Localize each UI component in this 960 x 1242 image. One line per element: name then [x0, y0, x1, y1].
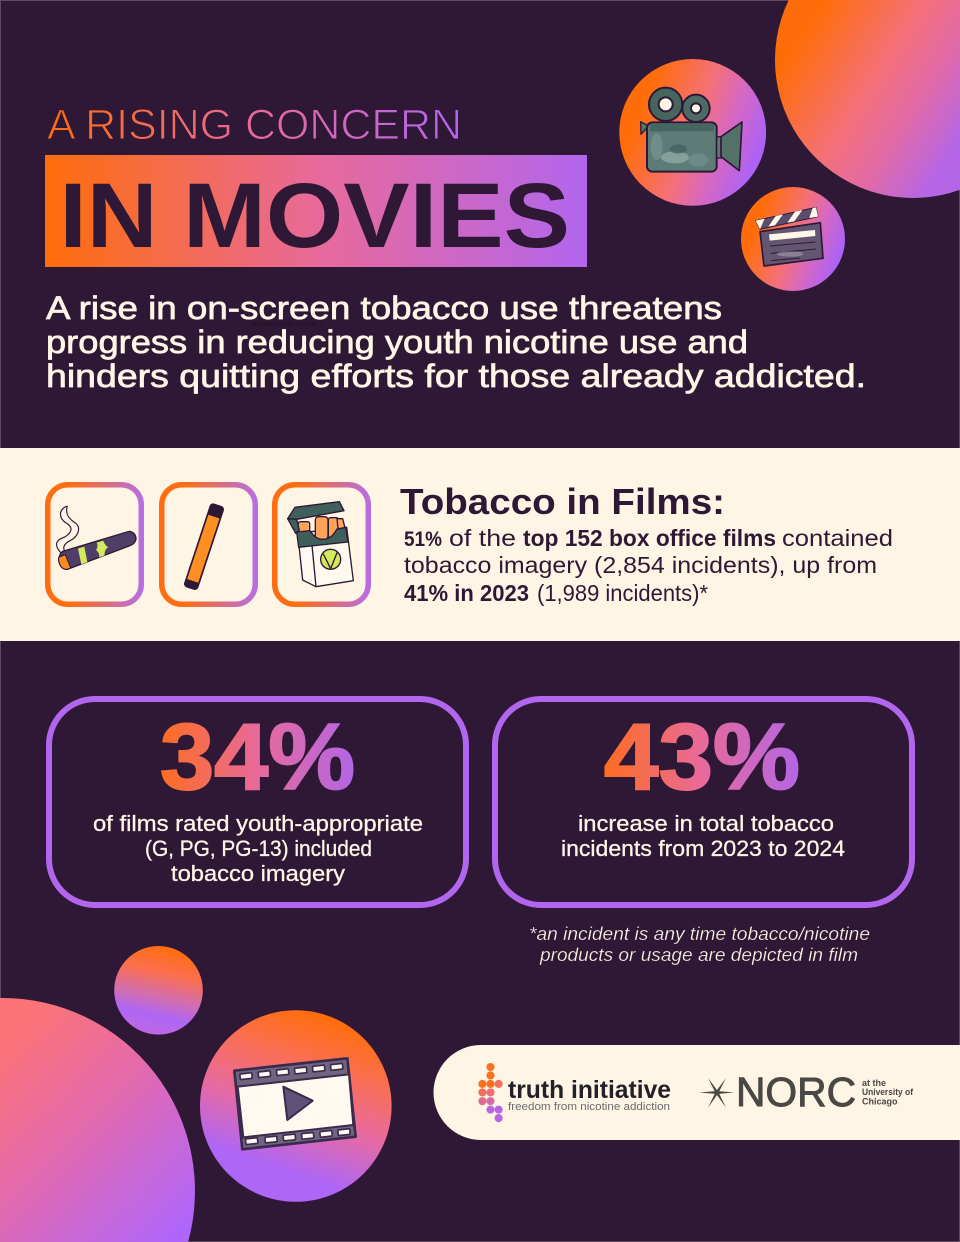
- icon: film strip: [200, 1010, 392, 1202]
- decorative circle: lower left small: [114, 946, 203, 1035]
- panel: tobacco in films: [0, 448, 960, 641]
- panel: logos: [434, 1045, 960, 1140]
- logo: truth initiative: freedom from nicotine addiction: [508, 1101, 670, 1113]
- stray label: Movies-info-social-1: [252, 319, 324, 328]
- title: kicker: A RISING CONCERN: [47, 101, 462, 149]
- logo: NORC: NORC: [736, 1069, 856, 1115]
- text block: tobacco stats: 41% in 2023: [404, 580, 529, 606]
- text block: tobacco stats: [404, 525, 893, 606]
- stat card: 43%: 43%: [604, 704, 800, 809]
- logo: NORC: [699, 1069, 914, 1115]
- text block: tobacco stats: of the: [449, 525, 516, 551]
- icon: vape: [162, 485, 255, 604]
- stat card: 34%: [49, 699, 466, 905]
- footnote: products or usage are depicted in film: [539, 945, 858, 965]
- subtitle text block: hinders quitting efforts for those already addicted.: [46, 358, 866, 394]
- subtitle text block: progress in reducing youth nicotine use and: [46, 324, 748, 360]
- text block: tobacco stats: (1,989 incidents)*: [537, 580, 708, 606]
- decorative circle: lower left large: [0, 998, 195, 1242]
- footnote: [529, 924, 870, 965]
- subtitle text block: A rise in on-screen tobacco use threatens: [46, 290, 722, 326]
- stat card: 34%: (G, PG, PG-13) included: [145, 836, 372, 861]
- logo: truth initiative: truth initiative: [508, 1076, 671, 1104]
- stat card: 43%: [495, 699, 912, 905]
- decorative circle: top right: [775, 0, 960, 198]
- icon: cigar: [48, 485, 141, 604]
- text block: tobacco stats: top 152 box office films: [523, 525, 776, 551]
- title: in movies band: IN: [60, 165, 158, 267]
- title: in movies band: MOVIES: [183, 165, 570, 267]
- icon: movie camera: [619, 59, 766, 206]
- stat card: 34%: 34%: [160, 704, 355, 809]
- logo: NORC: Chicago: [862, 1096, 898, 1106]
- heading: tobacco in films: Tobacco in Films:: [400, 481, 725, 522]
- footnote: *an incident is any time tobacco/nicotine: [529, 924, 870, 944]
- stat card: 34%: of films rated youth-appropriate: [93, 811, 423, 836]
- title: in movies band: [45, 155, 587, 267]
- text block: tobacco stats: 51%: [404, 528, 442, 551]
- logo: NORC: at the: [862, 1078, 886, 1088]
- text block: tobacco stats: contained: [782, 525, 893, 551]
- subtitle text block: [46, 290, 866, 394]
- stat card: 34%: tobacco imagery: [171, 861, 345, 886]
- stat card: 43%: incidents from 2023 to 2024: [561, 836, 845, 861]
- logo: NORC: University of: [862, 1087, 914, 1097]
- icon: clapperboard: [741, 187, 845, 291]
- logo: truth initiative: [478, 1063, 671, 1122]
- stat card: 43%: increase in total tobacco: [578, 811, 834, 836]
- text block: tobacco stats: tobacco imagery (2,854 incidents), up from: [404, 552, 877, 578]
- icon: cigarette pack: [275, 485, 368, 604]
